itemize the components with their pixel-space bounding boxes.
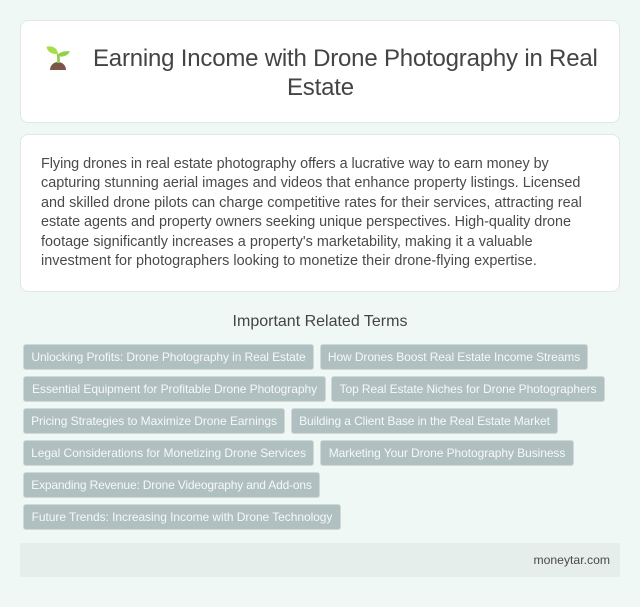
tag: Unlocking Profits: Drone Photography in Real Estate: [31, 350, 306, 364]
tag: [320, 344, 588, 370]
text block: [41, 156, 582, 269]
heading: Estate: [287, 74, 354, 101]
panel: title card: [20, 20, 620, 123]
tag: Building a Client Base in the Real Estate Market: [299, 414, 550, 428]
tag: [291, 408, 558, 434]
tag: Expanding Revenue: Drone Videography and Add-ons: [31, 478, 312, 492]
text block: capturing stunning aerial images and videos that enhance property listings. Licensed: [41, 175, 580, 191]
tag: [320, 440, 574, 466]
panel: description: [20, 134, 620, 292]
tag: Marketing Your Drone Photography Business: [329, 446, 565, 460]
tag: [23, 408, 285, 434]
text block: footage significantly increases a property's marketability, making it a valuable: [41, 234, 533, 250]
text block: investment for photographers looking to monetize their drone-flying expertise.: [41, 253, 537, 269]
text block: Flying drones in real estate photography offers a lucrative way to earn money by: [41, 156, 549, 172]
tag: [23, 472, 320, 498]
footer: [20, 543, 620, 577]
text block: estate agents and property owners seeking unique perspectives. High-quality drone: [41, 214, 571, 230]
heading: Earning Income with Drone Photography in Real: [93, 45, 598, 72]
tag: [23, 376, 326, 402]
tag list: [23, 344, 605, 530]
heading: related terms: Important Related Terms: [233, 313, 407, 330]
tag: Future Trends: Increasing Income with Drone Technology: [32, 510, 332, 524]
tag: Top Real Estate Niches for Drone Photographers: [340, 382, 596, 396]
tag: [23, 440, 314, 466]
tag: Legal Considerations for Monetizing Drone Services: [31, 446, 306, 460]
source credit: moneytar.com: [533, 553, 610, 567]
tag: Essential Equipment for Profitable Drone Photography: [32, 382, 317, 396]
icon: seedling: [46, 46, 70, 70]
tag: [23, 504, 341, 530]
tag: [331, 376, 605, 402]
tag: [23, 344, 314, 370]
tag: Pricing Strategies to Maximize Drone Earnings: [31, 414, 277, 428]
heading: [93, 45, 598, 101]
tag: How Drones Boost Real Estate Income Streams: [328, 350, 580, 364]
text block: and skilled drone pilots can charge competitive rates for their services, attracting real: [41, 195, 582, 211]
